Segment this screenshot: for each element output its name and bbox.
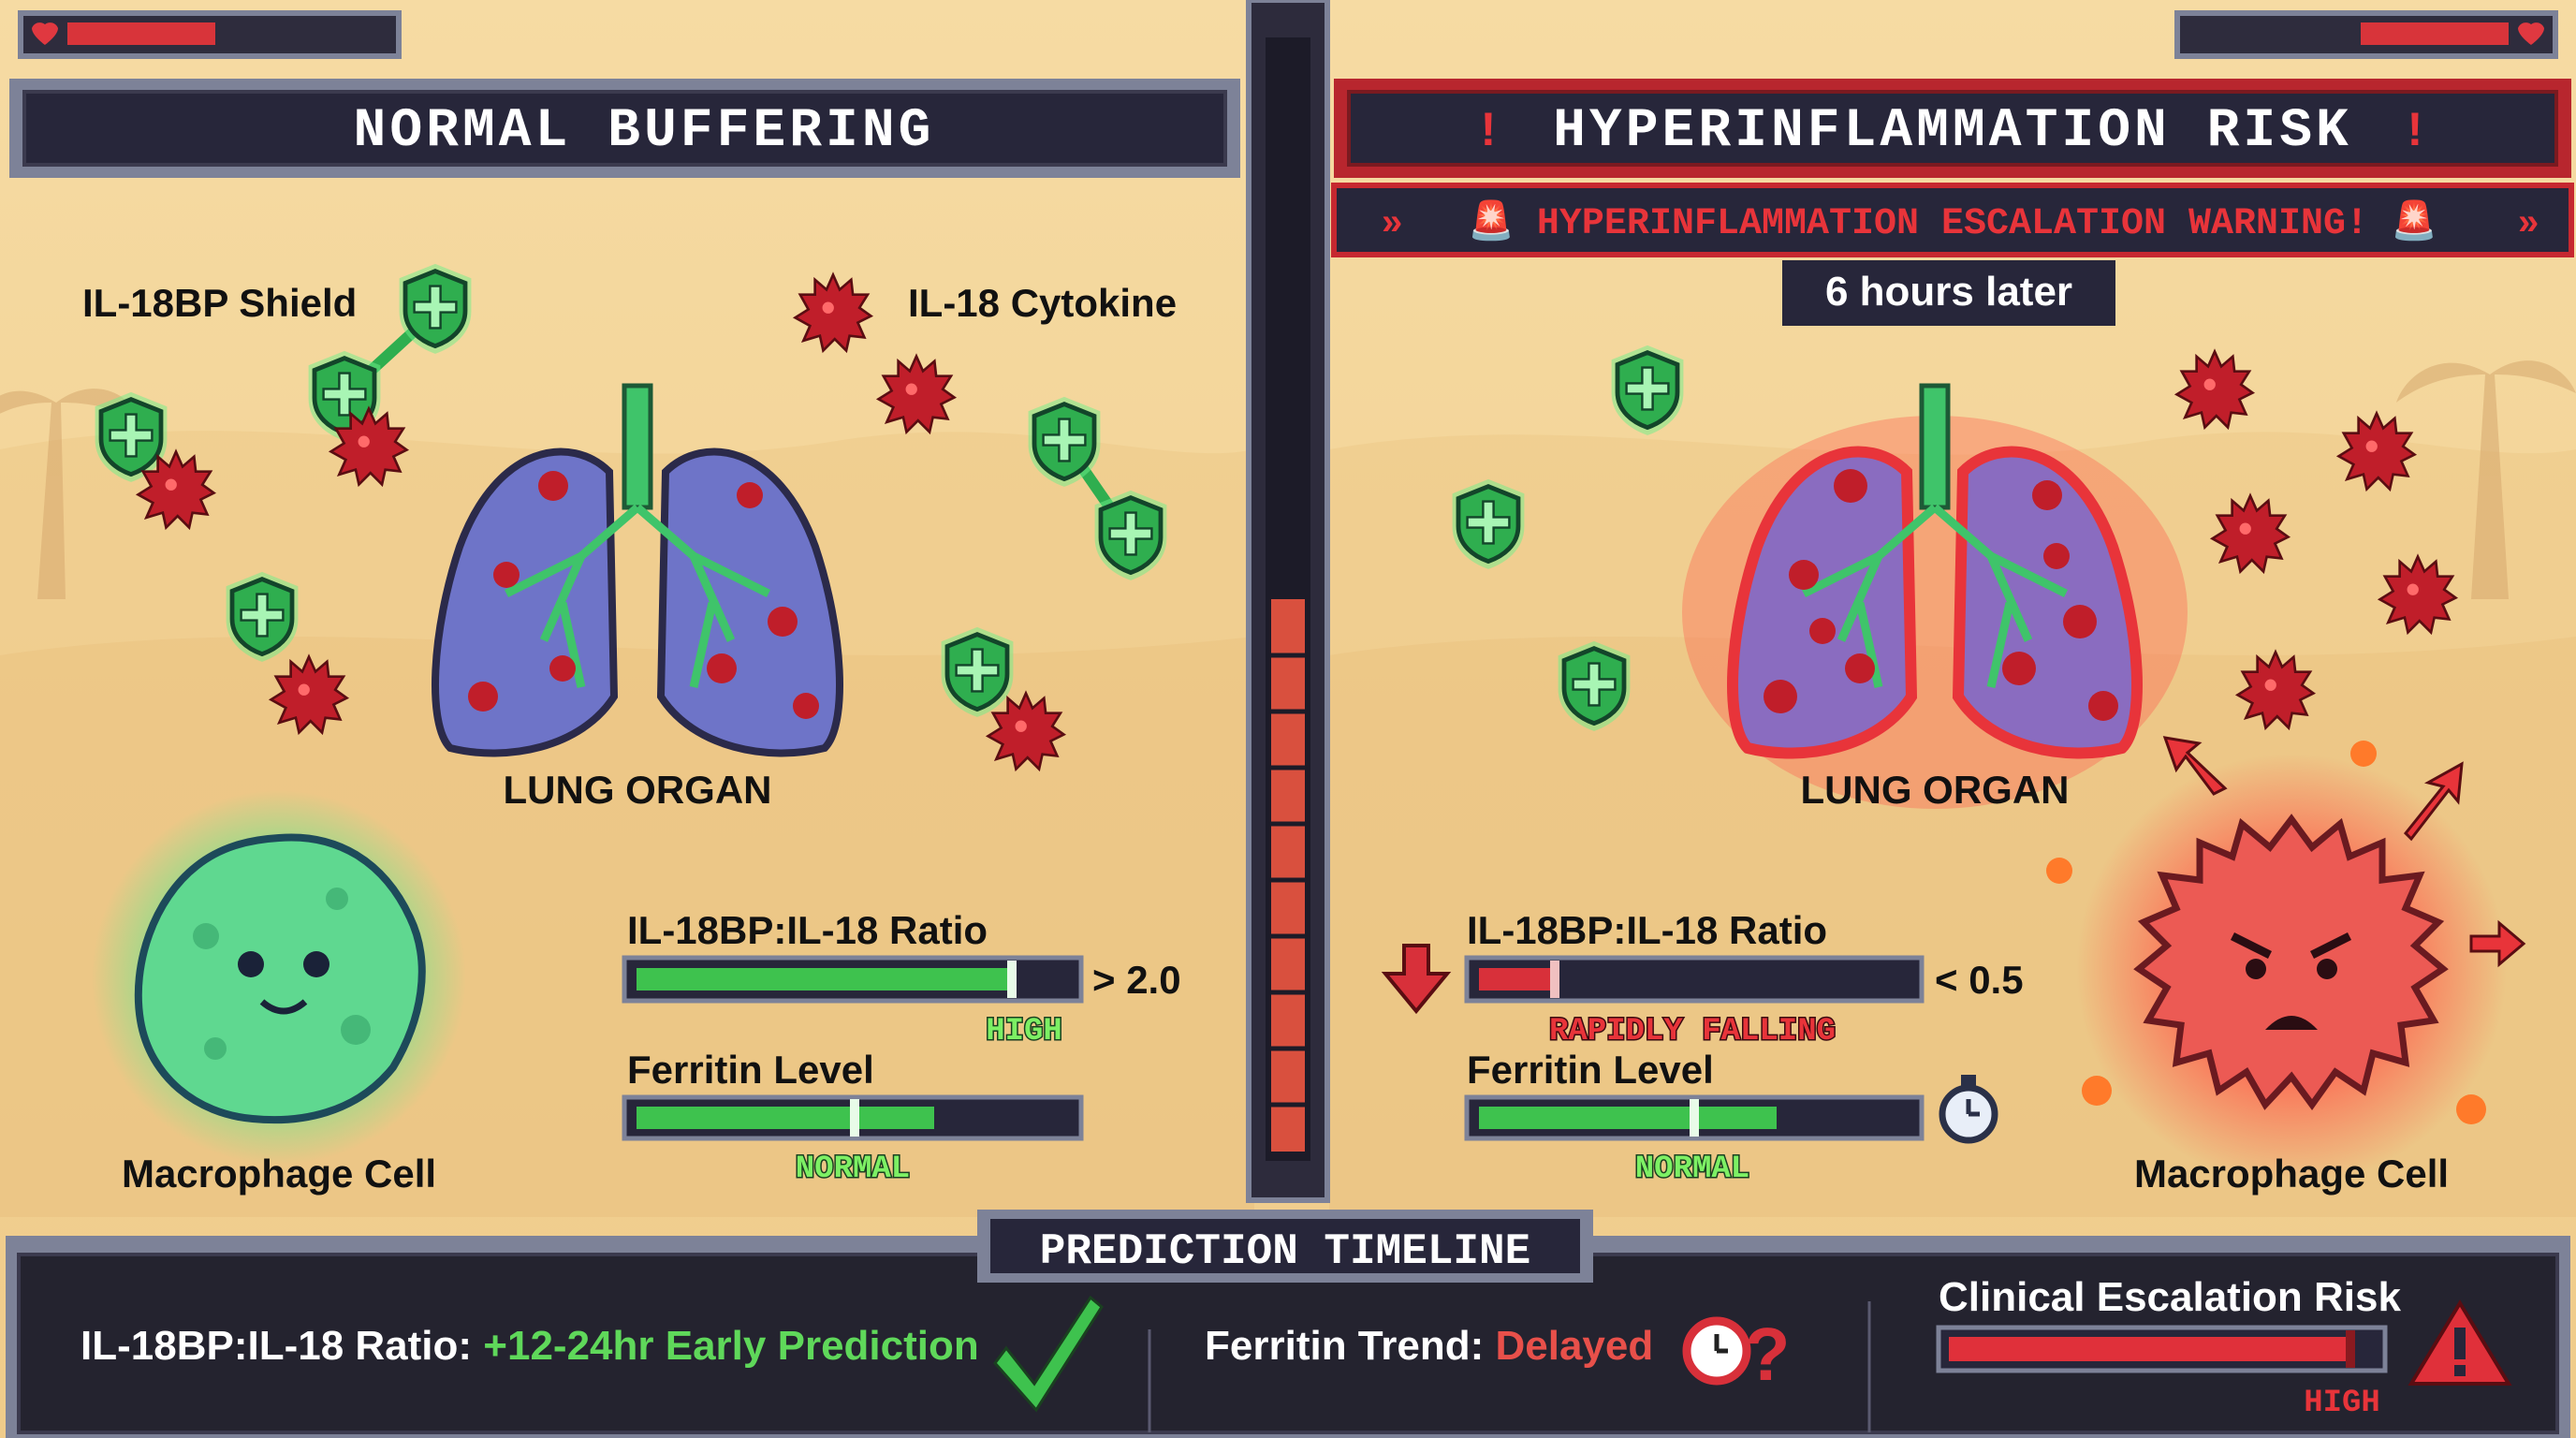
right ferritin gauge: Ferritin Level [1467, 1048, 1714, 1092]
title banner: hyperinflammation risk: ! [1481, 103, 1496, 155]
timeline title tab: PREDICTION TIMELINE [1040, 1227, 1530, 1276]
left ferritin gauge: Ferritin Level [627, 1048, 874, 1092]
health bar left [21, 13, 399, 56]
health bar right [2177, 13, 2555, 56]
clinical escalation risk gauge: HIGH [2304, 1386, 2380, 1421]
left ratio gauge: > 2.0 [1092, 958, 1181, 1002]
left ferritin gauge [624, 1048, 1081, 1187]
clinical escalation risk gauge [1939, 1274, 2401, 1421]
left ratio gauge: IL-18BP:IL-18 Ratio [627, 908, 988, 952]
icon: warning triangle [2411, 1303, 2509, 1384]
warning strip: » [1382, 201, 1402, 242]
legend: shield label: IL-18BP Shield [82, 281, 357, 325]
right ferritin gauge: NORMAL [1635, 1152, 1749, 1187]
timeline title tab [977, 1210, 1593, 1283]
icon: checkmark [995, 1298, 1102, 1410]
left lungs [435, 386, 840, 753]
right lungs (inflamed) [1682, 386, 2188, 809]
right shields and cytokines [1453, 345, 2455, 731]
left macrophage label: Macrophage Cell [122, 1152, 436, 1196]
title banner: normal buffering: NORMAL BUFFERING [354, 101, 934, 162]
icon: alarm clock and question [1687, 1313, 1790, 1396]
warning strip: » [2518, 201, 2539, 242]
right ratio gauge: RAPIDLY FALLING [1549, 1014, 1836, 1049]
ratio prediction text: IL-18BP:IL-18 Ratio: +12-24hr Early Prediction [80, 1323, 979, 1369]
legend: cytokine label: IL-18 Cytokine [908, 281, 1177, 325]
left ratio gauge: HIGH [986, 1014, 1062, 1049]
title banner: hyperinflammation risk [1334, 79, 2571, 178]
icon: down arrow [1385, 946, 1447, 1011]
right ratio gauge: IL-18BP:IL-18 Ratio [1467, 908, 1827, 952]
right ratio gauge: < 0.5 [1935, 958, 2024, 1002]
icon: stopwatch [1942, 1075, 1995, 1140]
left shields and cytokines [95, 264, 1166, 769]
right lung label: LUNG ORGAN [1801, 768, 2069, 812]
warning strip [1334, 185, 2571, 255]
right ferritin gauge [1467, 1048, 1922, 1187]
center divider meter [1249, 0, 1327, 1200]
right macrophage (angry) [2046, 738, 2524, 1184]
left ferritin gauge: NORMAL [796, 1152, 910, 1187]
bottom panel: prediction timeline [6, 1210, 2570, 1438]
right ratio gauge [1467, 908, 2024, 1049]
title banner: normal buffering [9, 79, 1240, 178]
time label: 6 hours later: 6 hours later [1825, 269, 2072, 315]
warning strip: 🚨 HYPERINFLAMMATION ESCALATION WARNING! 🚨 [1468, 198, 2437, 245]
ferritin trend text: Ferritin Trend: Delayed [1205, 1323, 1653, 1369]
left lung label: LUNG ORGAN [504, 768, 771, 812]
clinical escalation risk gauge: Clinical Escalation Risk [1939, 1274, 2401, 1320]
title banner: hyperinflammation risk: ! [2408, 103, 2422, 155]
left ratio gauge [624, 908, 1181, 1049]
icon: alarm clock and question: ? [1745, 1313, 1790, 1396]
time label: 6 hours later [1782, 260, 2115, 326]
left macrophage (calm) [92, 790, 466, 1165]
right macrophage label: Macrophage Cell [2134, 1152, 2449, 1196]
title banner: hyperinflammation risk: HYPERINFLAMMATION RISK [1553, 101, 2352, 162]
